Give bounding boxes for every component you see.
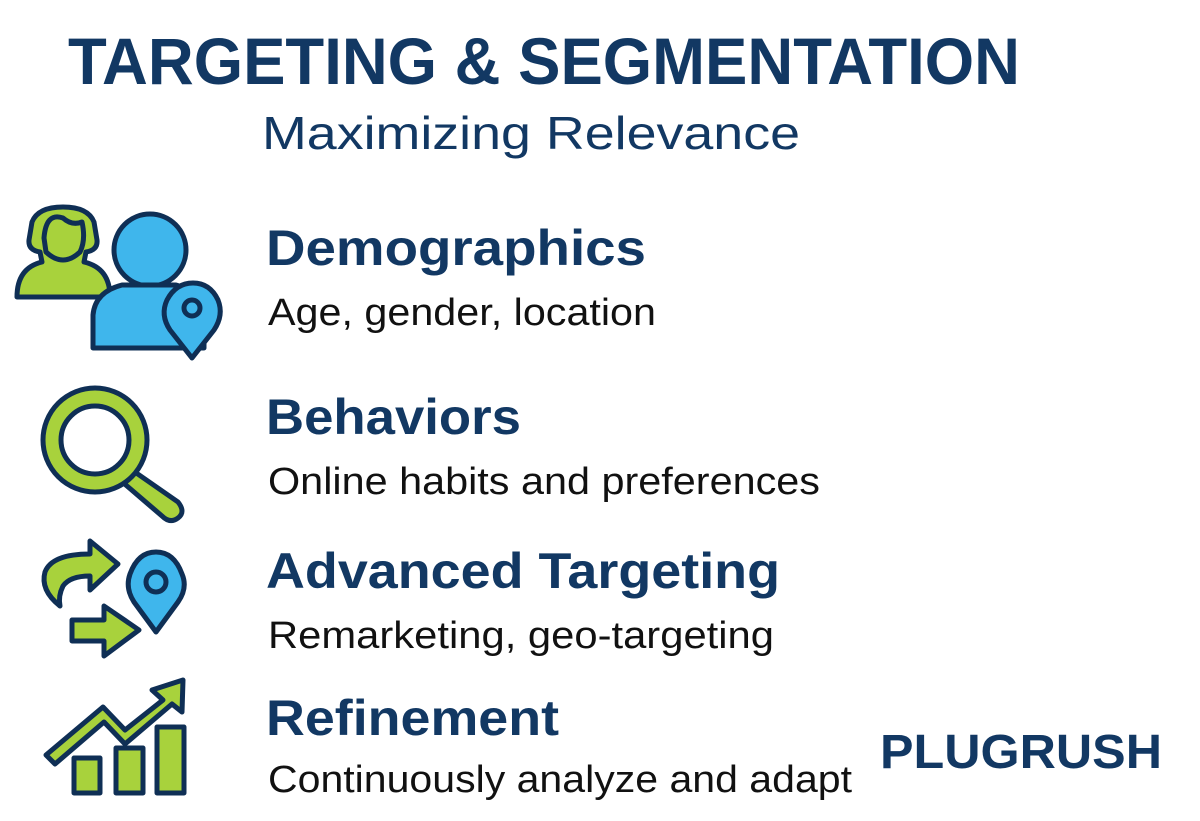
heading: Demographics: Demographics: [266, 220, 646, 276]
text: demographics desc: Age, gender, location: [268, 292, 656, 334]
icon: people with location pin: [17, 207, 220, 358]
heading: Advanced Targeting: Advanced Targeting: [266, 543, 780, 599]
text: advanced desc: Remarketing, geo-targeting: [268, 615, 774, 657]
heading: Behaviors: Behaviors: [266, 389, 521, 445]
icon: magnifier: [43, 388, 182, 521]
icon: growth chart: [46, 680, 184, 793]
text: behaviors desc: Online habits and preferences: [268, 461, 820, 503]
icon: arrows and pin: [44, 541, 184, 656]
heading: Refinement: Refinement: [266, 690, 559, 746]
text: refinement desc: Continuously analyze and adapt: [268, 759, 852, 801]
subtitle: Maximizing Relevance: [262, 107, 800, 159]
title: TARGETING & SEGMENTATION: [68, 24, 1020, 98]
logo: PLUGRUSH: PLUGRUSH: [880, 726, 1162, 779]
